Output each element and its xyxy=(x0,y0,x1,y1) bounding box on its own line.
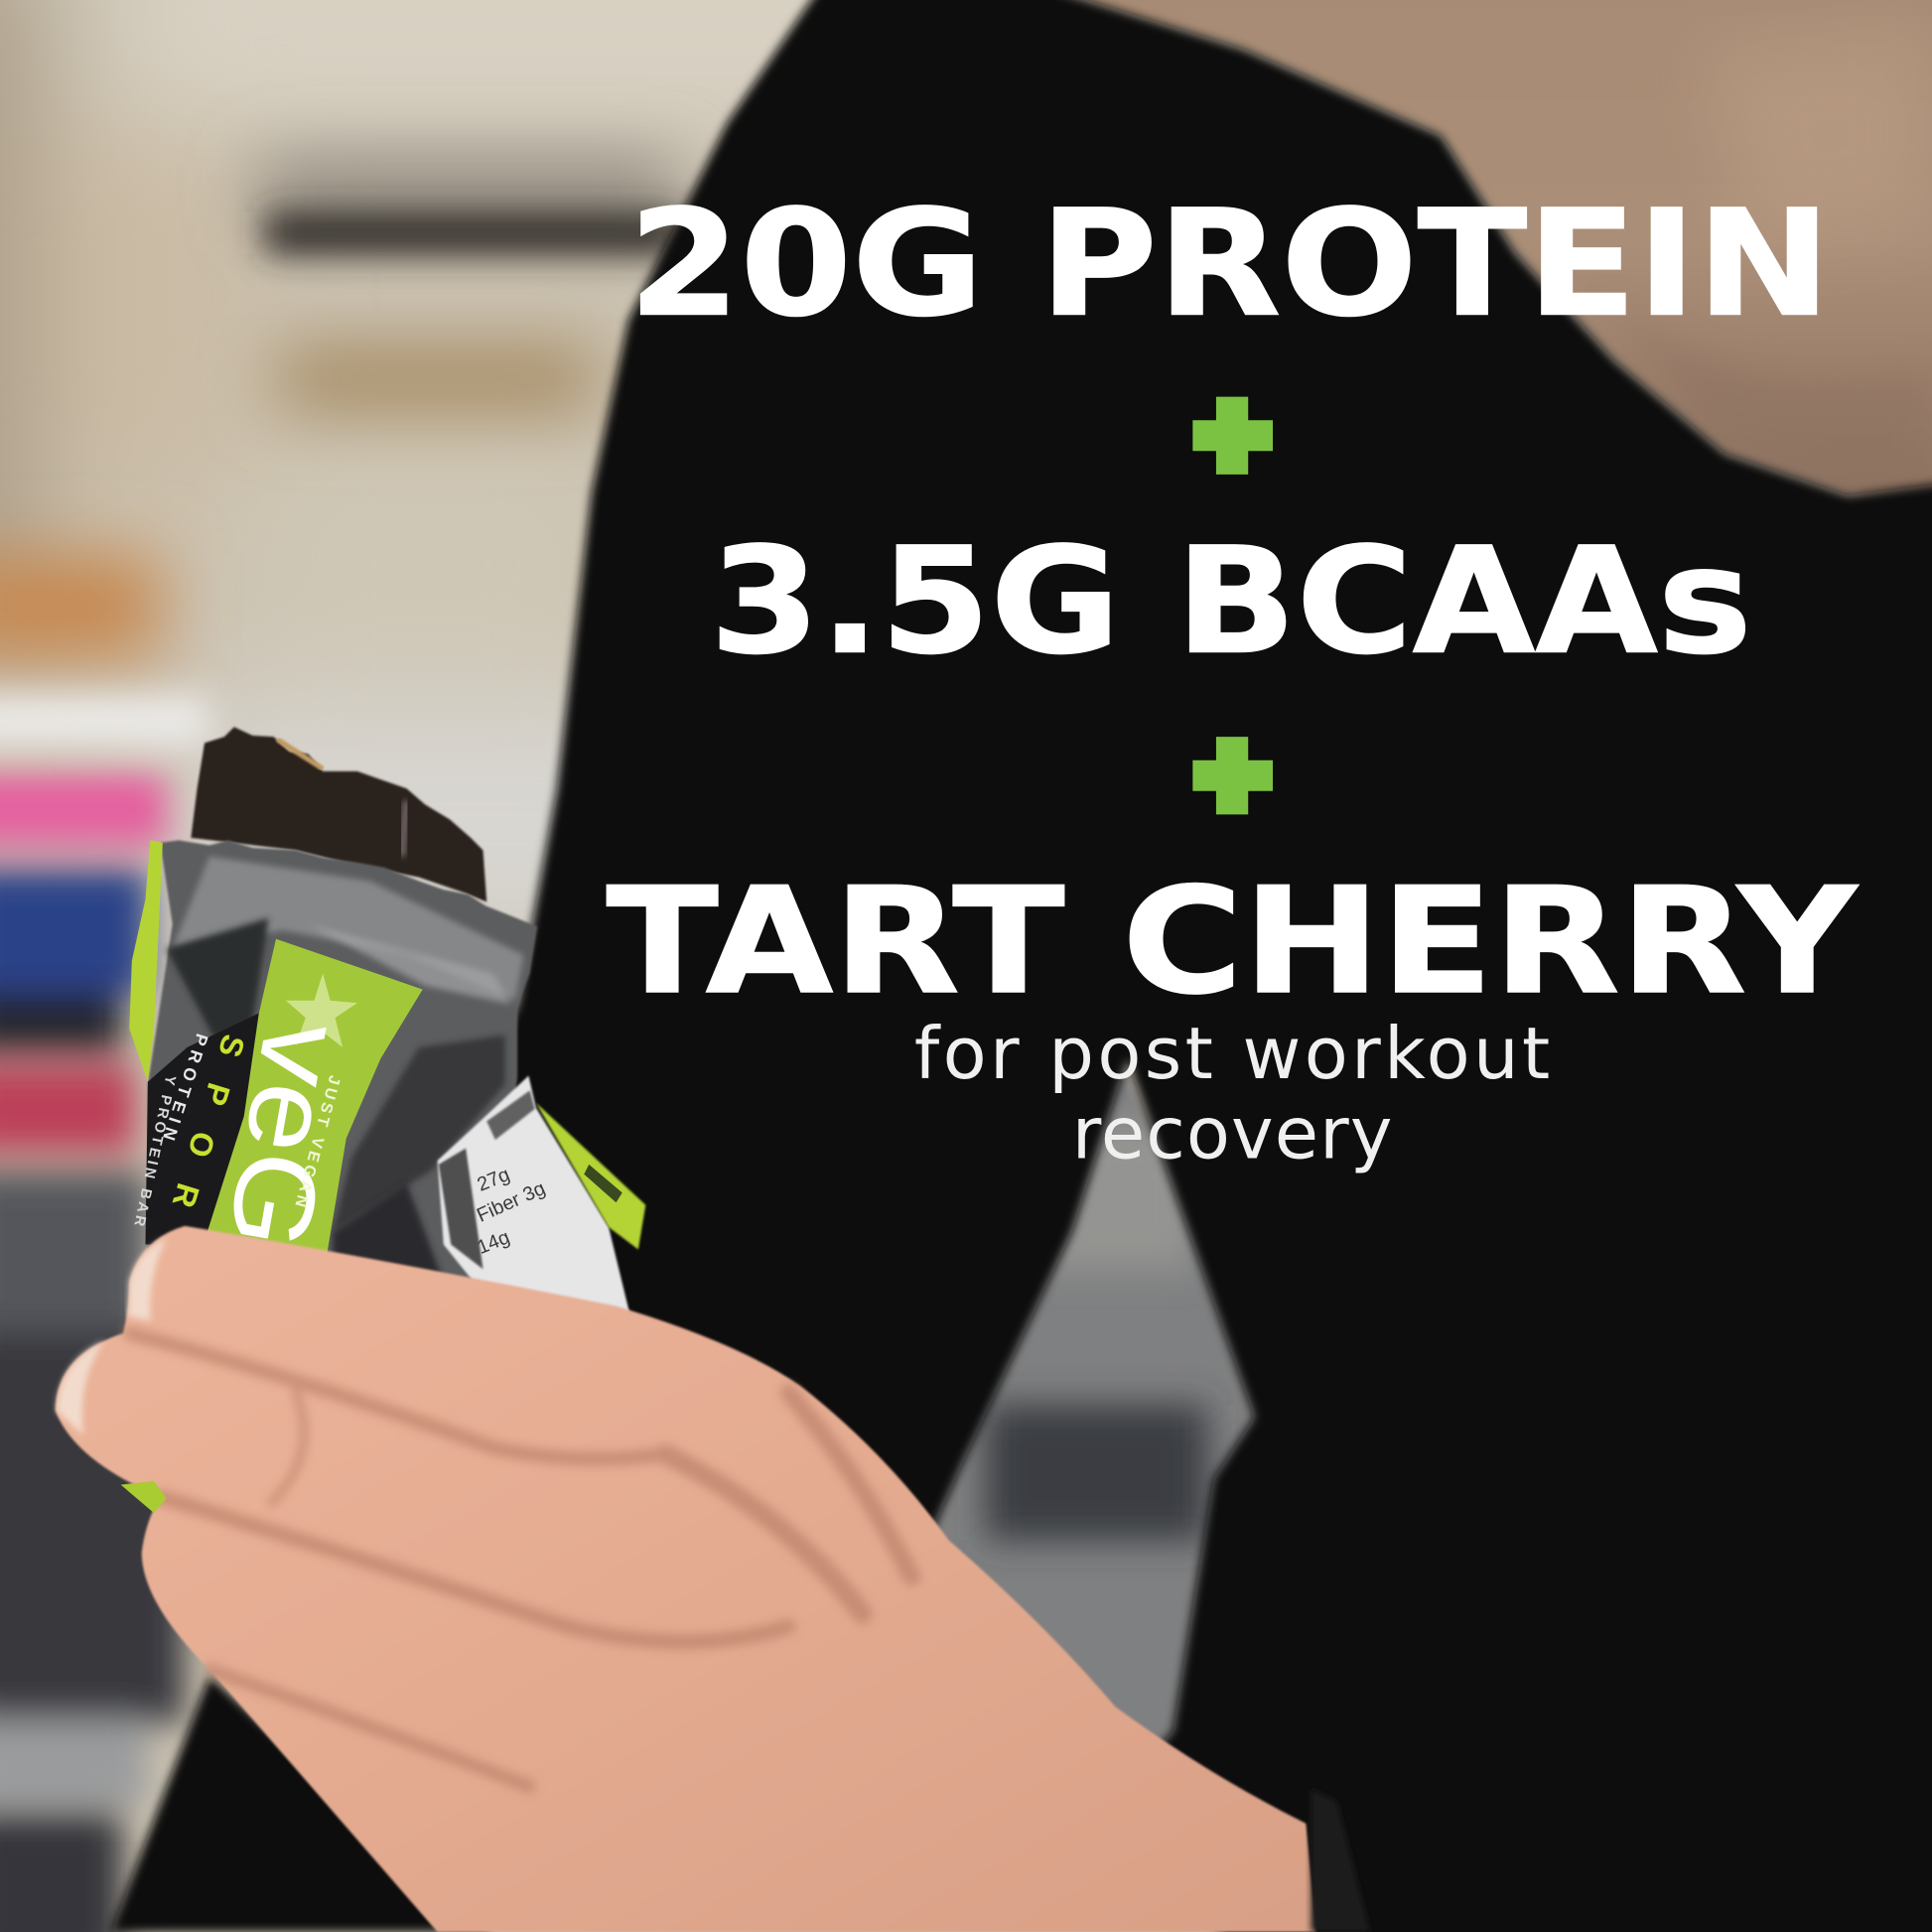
white nutrition label xyxy=(438,1075,630,1318)
brand strapline: JUST VEGAN xyxy=(291,1073,344,1209)
nutrition label text xyxy=(474,1164,549,1259)
fingernails xyxy=(128,1238,167,1320)
plus icon xyxy=(1192,737,1273,814)
brand text: veG xyxy=(204,1013,367,1259)
nutrition label text: 14g xyxy=(475,1226,513,1259)
headline stack xyxy=(607,178,1860,1175)
headline: BCAAs: 3.5G BCAAs xyxy=(710,516,1752,687)
nutrition label text: 27g xyxy=(475,1164,513,1196)
gap between arm and torso xyxy=(911,1047,1282,1799)
grey foil wrapper xyxy=(148,840,537,1307)
hand holding the bar xyxy=(56,1226,1315,1932)
protein bar xyxy=(129,727,645,1318)
headline: 20G protein: 20G PROTEIN xyxy=(628,178,1831,348)
shirt cuff xyxy=(1311,1789,1370,1932)
lime brand panel xyxy=(204,939,423,1257)
lime wrapper corner under finger xyxy=(121,1481,167,1513)
finger shading xyxy=(129,1333,911,1787)
subheading line one: for post workout xyxy=(914,1012,1550,1095)
headline: tart cherry: TART CHERRY xyxy=(607,856,1860,1027)
brand star xyxy=(286,973,357,1047)
dark text panel xyxy=(145,1011,265,1244)
lime edge strip xyxy=(129,840,163,1082)
chocolate bar xyxy=(191,727,486,901)
subheading line two: recovery xyxy=(1072,1092,1392,1175)
small wrapper text: Y PROTEIN BAR xyxy=(130,1073,178,1228)
protein text: PROTEIN xyxy=(159,1032,212,1143)
neck skin xyxy=(1035,0,1932,495)
nutrition label text: Fiber 3g xyxy=(474,1177,549,1227)
sport text: SPOR xyxy=(166,1031,252,1212)
plus icon xyxy=(1192,397,1273,475)
lime wrapper tag xyxy=(536,1103,645,1249)
